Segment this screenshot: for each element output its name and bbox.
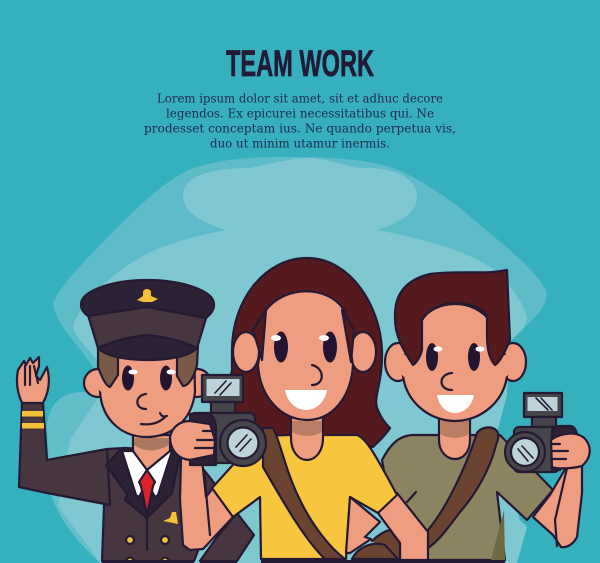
pilot ears [84,369,112,397]
woman neck shadow [292,421,322,436]
pilot neck [133,435,170,470]
woman hand [170,421,215,460]
pilot face [100,345,195,437]
pilot nose [137,394,146,409]
pilot ear seam [97,368,107,392]
pilot [17,280,254,563]
pilot hair [98,345,118,387]
man neck shadow [440,421,469,438]
body text [144,90,456,150]
pilot eyes [122,366,134,390]
man hair [395,270,510,365]
man arm [533,466,582,547]
body text: legendos. Ex epicurei necessitatibus qui. Ne [166,106,434,120]
woman hip gap [365,522,390,541]
man mouth [437,395,474,413]
woman face [258,291,353,420]
man shirt shadow [491,510,505,560]
background cloud shapes [47,157,547,563]
pilot far sleeve [200,513,254,561]
pilot cap [81,280,214,360]
man strap [428,427,498,548]
woman right arm [378,493,428,560]
man ears [385,343,411,381]
pilot shirt collar [122,451,172,497]
woman left arm [180,458,233,550]
woman nose [312,365,322,385]
pilot waving arm [19,403,110,505]
woman shirt [212,435,397,559]
man ear seams [400,355,410,377]
woman hair strands [253,310,266,360]
pilot cuff stripes [22,411,43,416]
man with camera [382,270,590,560]
man neck [439,418,470,459]
woman hair back [220,258,390,447]
woman hip arm [346,497,380,553]
pilot neck shadow [134,438,169,450]
woman eyes [274,332,288,362]
woman ears [233,332,259,372]
pilot jacket details [146,518,148,550]
woman [170,258,428,560]
woman mouth [285,390,327,410]
pilot tie [139,470,155,515]
body text: Lorem ipsum dolor sit amet, sit et adhuc decore [157,90,443,106]
body text: duo ut minim utamur inermis. [210,136,390,150]
man nose [442,373,452,390]
bottom edge lines [102,560,505,563]
woman bag [352,530,400,559]
man eyes [426,343,438,371]
man shirt [382,435,553,560]
woman neck [291,415,323,460]
pilot torso [102,448,217,561]
pilot hand [17,357,49,403]
man face [403,304,507,421]
pilot smile [141,413,167,424]
body text: prodesset conceptam ius. Ne quando perpetua vis, [144,120,456,136]
title: TEAM WORK [226,42,374,84]
man hand [551,434,590,468]
pilot-side camera [190,375,266,466]
man camera [505,393,577,472]
woman strap [263,428,345,559]
pilot lapels [106,450,181,518]
